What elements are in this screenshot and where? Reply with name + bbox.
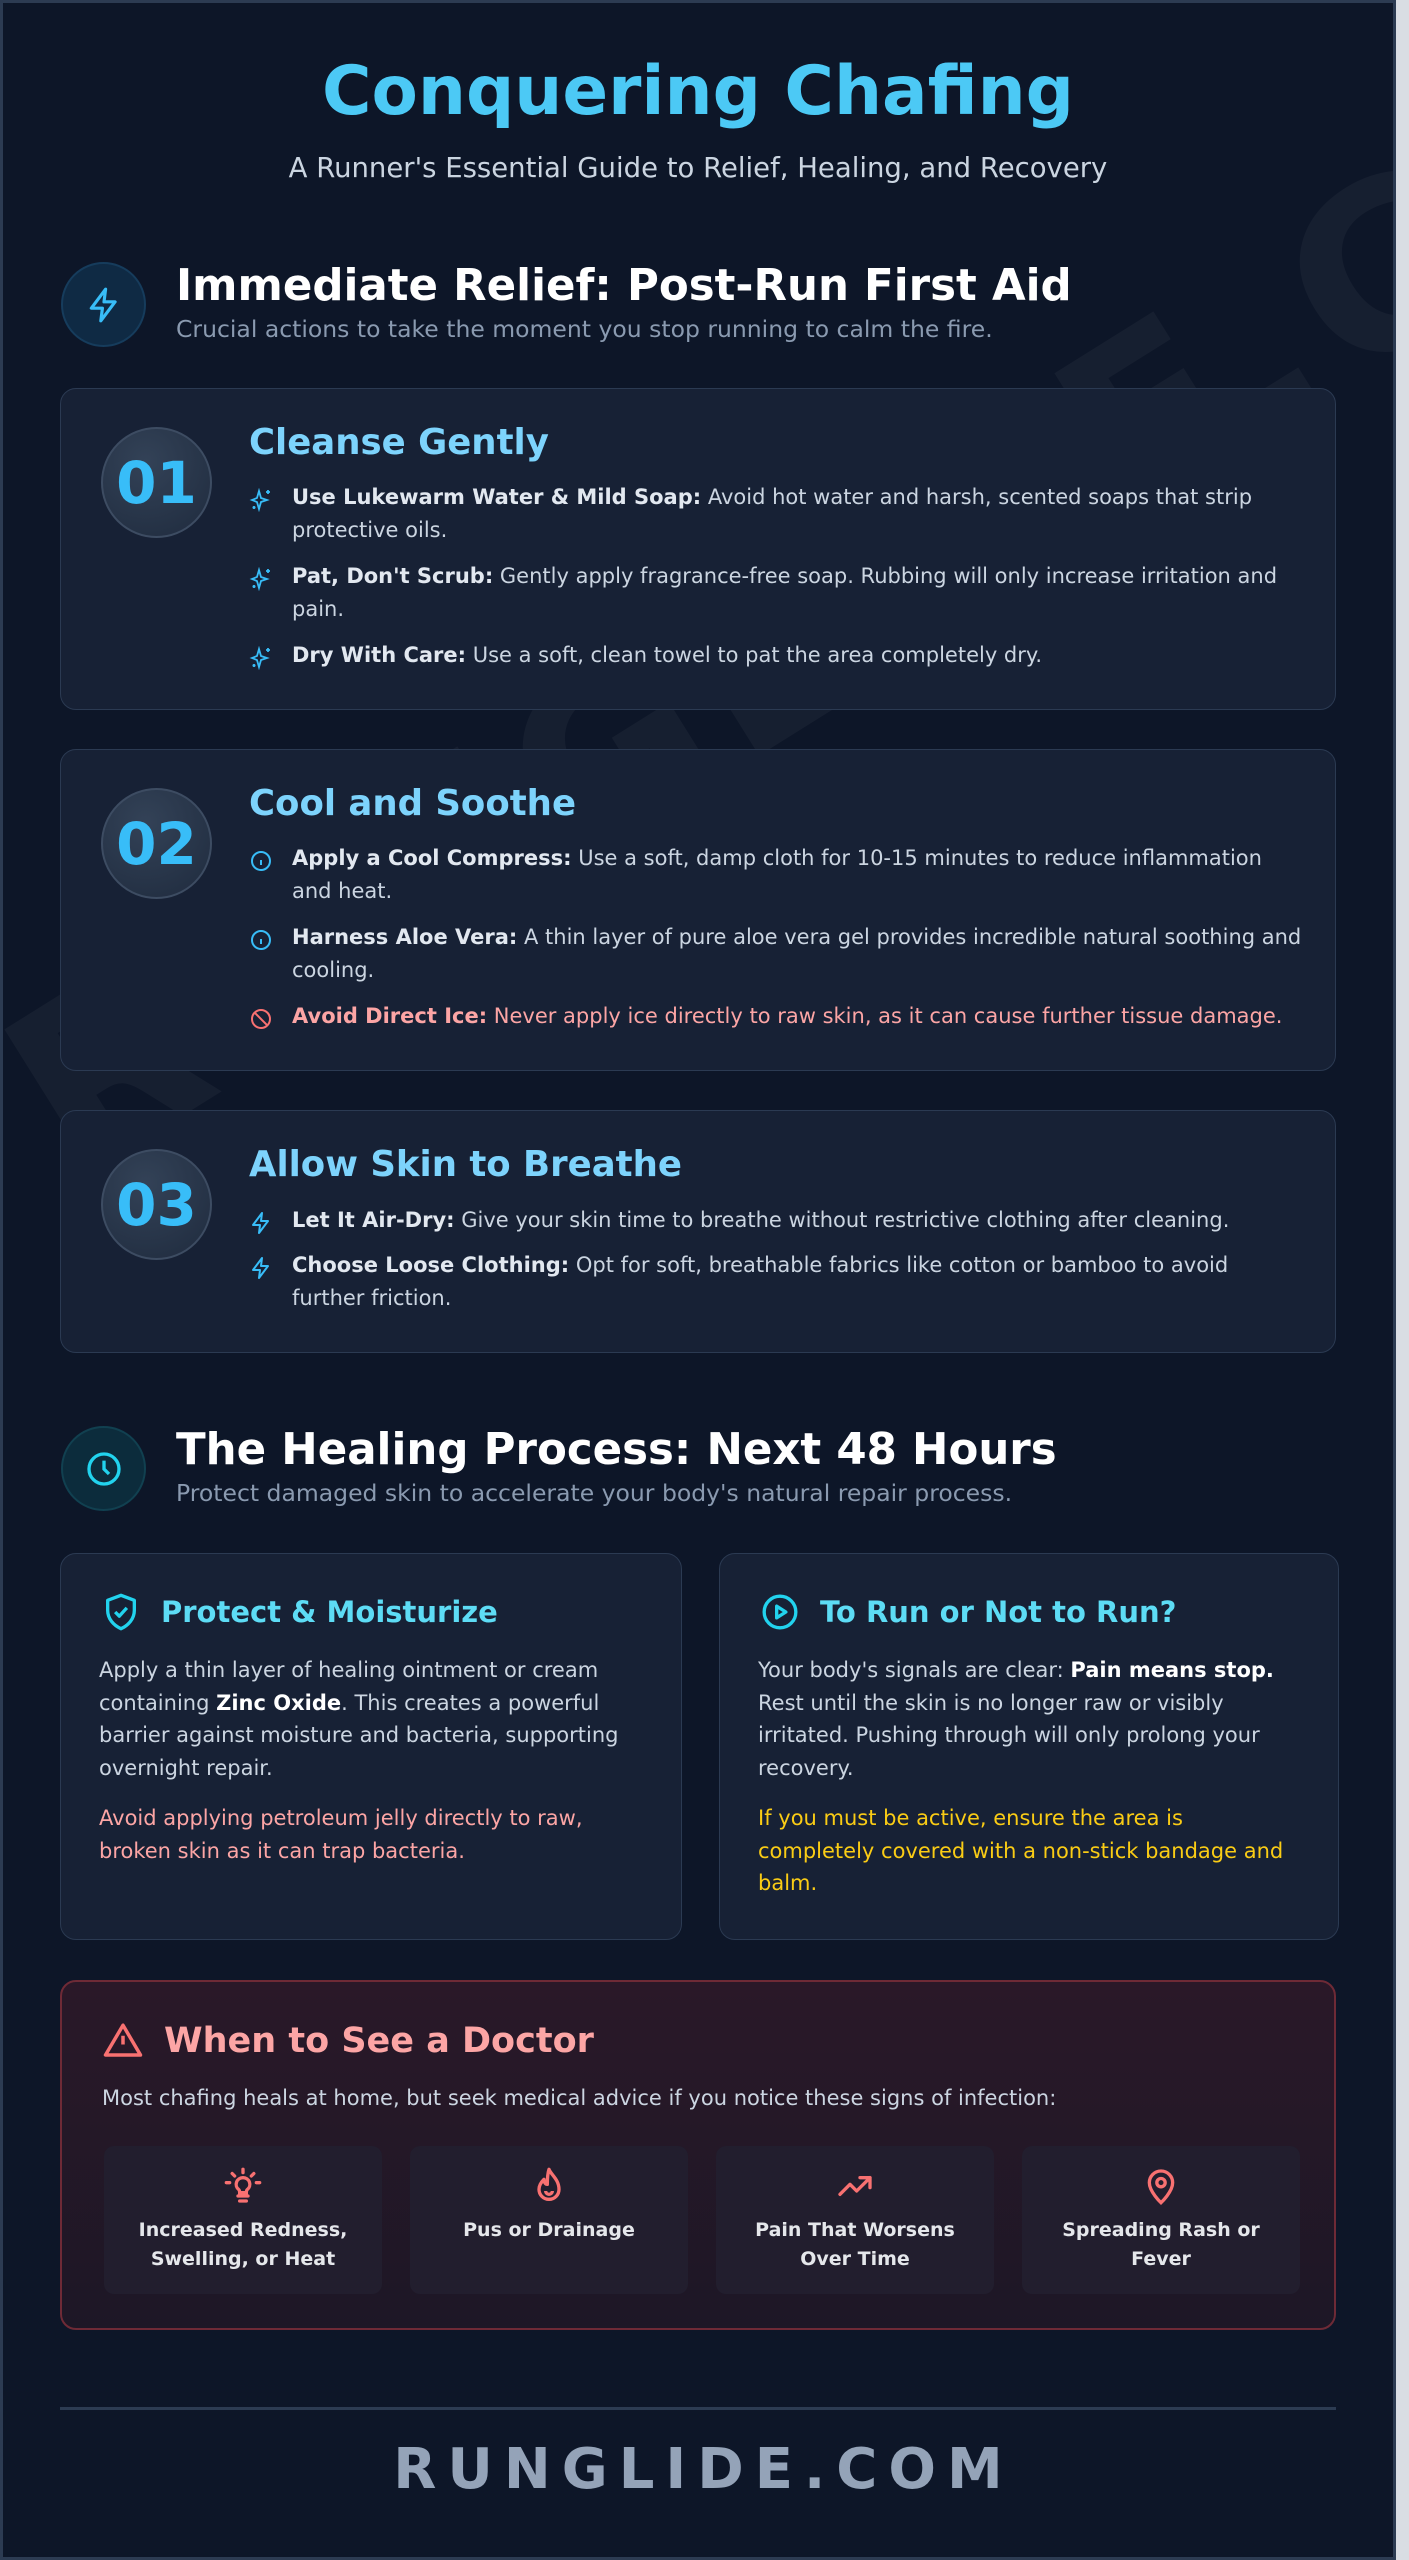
sign: rash or fever: Fever (1131, 2248, 1191, 2270)
heading: protect: Protect & Moisturize (161, 1595, 498, 1629)
section heading 1 (176, 261, 1072, 343)
panel: step 01: Dry With Care: Use a soft, clean towel to pat the area completely dry. (292, 643, 1042, 667)
panel: step 03: Choose Loose Clothing: Opt for soft, breathable fabrics like cotton or bamboo to avoid further friction. (292, 1253, 1228, 1310)
sign: pus (410, 2146, 688, 2294)
panel: step 01 (60, 388, 1336, 710)
panel: step 02: Harness Aloe Vera: A thin layer of pure aloe vera gel provides incredible natural soothing and cooling. (292, 925, 1301, 982)
heading: run: To Run or Not to Run? (820, 1595, 1176, 1629)
sign: pain worsens: Over Time (800, 2248, 910, 2270)
panel: to run or not (719, 1553, 1339, 1940)
panel: to run or not: If you must be active, ensure the area is completely covered with a non-stick bandage and balm. (758, 1806, 1283, 1895)
panel: step 03: Let It Air-Dry: Give your skin time to breathe without restrictive clothing after cleaning. (292, 1208, 1229, 1232)
icon: lightning section 1 (61, 262, 146, 347)
section heading 1: Immediate Relief: Post-Run First Aid (176, 261, 1072, 311)
panel: step 02: 02 (116, 810, 197, 878)
sign: redness (104, 2146, 382, 2294)
panel: protect & moisturize (60, 1553, 682, 1940)
panel: step 02: Cool and Soothe (249, 783, 576, 824)
icon: clock section 2 (61, 1426, 146, 1511)
panel: step 02 (60, 749, 1336, 1071)
panel: when to see a doctor (60, 1980, 1336, 2330)
section heading 2: The Healing Process: Next 48 Hours (176, 1425, 1057, 1475)
panel: step 02: Apply a Cool Compress: Use a soft, damp cloth for 10-15 minutes to reduce inflammation and heat. (292, 846, 1262, 903)
panel: to run or not: Your body's signals are clear: Pain means stop. Rest until the skin is no longer raw or visibly irritated. Pushing through will only prolong your recovery. (758, 1658, 1274, 1780)
section heading 1: Crucial actions to take the moment you stop running to calm the fire. (176, 315, 993, 343)
section heading 2: Protect damaged skin to accelerate your body's natural repair process. (176, 1479, 1012, 1507)
panel: step 01: Pat, Don't Scrub: Gently apply fragrance-free soap. Rubbing will only increase irritation and pain. (292, 564, 1277, 621)
sign: pain worsens: Pain That Worsens (755, 2219, 955, 2241)
panel: step 02: Avoid Direct Ice: Never apply ice directly to raw skin, as it can cause further tissue damage. (292, 1004, 1282, 1028)
sign: pus: Pus or Drainage (463, 2219, 635, 2241)
section heading 2 (176, 1425, 1057, 1507)
sign: pain worsens (716, 2146, 994, 2294)
sign: rash or fever: Spreading Rash or (1062, 2219, 1260, 2241)
panel: step 01: Use Lukewarm Water & Mild Soap: Avoid hot water and harsh, scented soaps that strip protective oils. (292, 485, 1252, 542)
panel: when to see a doctor: Most chafing heals at home, but seek medical advice if you notice these signs of infection: (102, 2086, 1056, 2110)
sign: redness: Increased Redness, (139, 2219, 347, 2241)
panel: step 03: 03 (116, 1170, 197, 1238)
panel: step 01: Cleanse Gently (249, 422, 549, 463)
panel: step 03 (60, 1110, 1336, 1353)
sign: redness: Swelling, or Heat (151, 2248, 335, 2270)
panel: protect & moisturize: Apply a thin layer of healing ointment or cream containing Zinc Oxide. This creates a powerful barrier against moisture and bacteria, supporting overnight repair. (99, 1658, 618, 1780)
panel: step 03: Allow Skin to Breathe (249, 1144, 682, 1185)
sign: rash or fever (1022, 2146, 1300, 2294)
heading: doctor: When to See a Doctor (164, 2021, 594, 2061)
panel: step 01: 01 (116, 448, 197, 516)
subtitle: A Runner's Essential Guide to Relief, Healing, and Recovery (289, 152, 1107, 184)
title: Conquering Chafing (322, 51, 1074, 130)
footer brand: RUNGLIDE.COM (393, 2437, 1014, 2502)
panel: protect & moisturize: Avoid applying petroleum jelly directly to raw, broken skin as it can trap bacteria. (99, 1806, 583, 1862)
